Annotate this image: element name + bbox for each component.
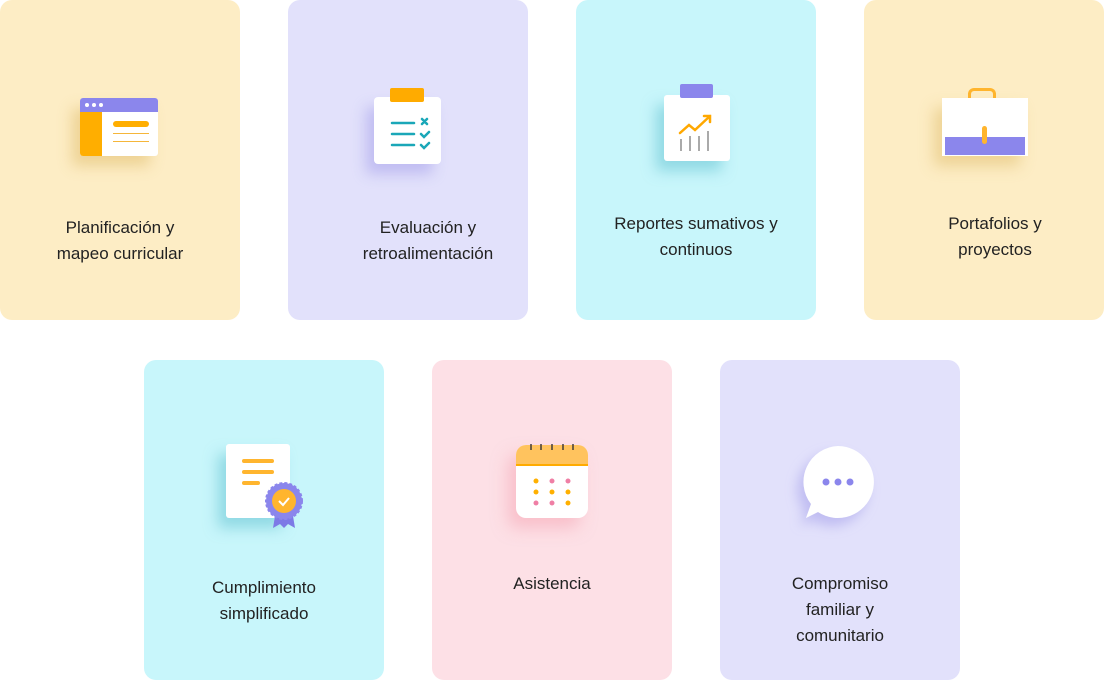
label bbox=[57, 218, 183, 263]
icon: certificate with badge bbox=[210, 444, 303, 536]
card: Portafolios bbox=[864, 0, 1104, 320]
label bbox=[792, 574, 888, 645]
label: proyectos bbox=[958, 240, 1032, 259]
icon: report clipboard chart bbox=[648, 84, 730, 178]
label: retroalimentación bbox=[363, 244, 493, 263]
label: simplificado bbox=[220, 604, 308, 623]
icon: clipboard checklist bbox=[360, 88, 441, 180]
label: Reportes sumativos y bbox=[614, 214, 778, 233]
label: mapeo curricular bbox=[57, 244, 183, 263]
label: Planificación y bbox=[66, 218, 174, 237]
label bbox=[614, 214, 778, 259]
label bbox=[212, 578, 316, 623]
card: Cumplimiento bbox=[144, 360, 384, 680]
card: Evaluación bbox=[288, 0, 528, 320]
icon: browser window bbox=[80, 98, 158, 156]
label: comunitario bbox=[796, 626, 884, 645]
icon: calendar bbox=[502, 444, 588, 534]
card: Asistencia bbox=[432, 360, 672, 680]
label bbox=[948, 214, 1042, 259]
icon: briefcase bbox=[927, 88, 1028, 173]
card: Reportes bbox=[576, 0, 816, 320]
label: Portafolios y bbox=[948, 214, 1042, 233]
icon: chat bubble bbox=[794, 446, 874, 530]
label: Asistencia bbox=[513, 574, 591, 593]
label: Compromiso bbox=[792, 574, 888, 593]
label: continuos bbox=[660, 240, 732, 259]
label: Evaluación y bbox=[380, 218, 476, 237]
label: Cumplimiento bbox=[212, 578, 316, 597]
card: Compromiso bbox=[720, 360, 960, 680]
label: familiar y bbox=[806, 600, 874, 619]
card: Planificación bbox=[0, 0, 240, 320]
label bbox=[363, 218, 493, 263]
